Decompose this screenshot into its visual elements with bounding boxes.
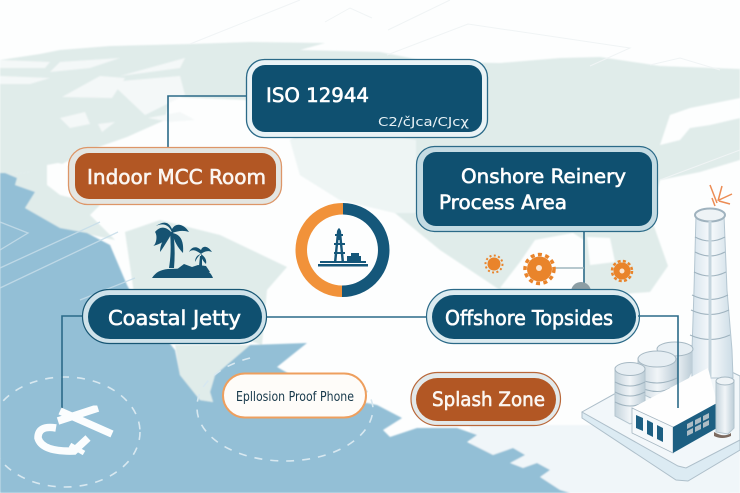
icon: anchor: [38, 408, 112, 453]
platform: [582, 352, 740, 481]
icon: small gear: [486, 256, 502, 272]
text: Process Area: Process Area: [439, 191, 567, 214]
text: Onshore Reinery: Onshore Reinery: [461, 165, 626, 188]
building: [632, 368, 717, 453]
panel: Indoor MCC Room: [68, 148, 282, 204]
panel: Splash Zone: [411, 372, 560, 426]
label: Coastal Jetty: Coastal Jetty: [108, 306, 241, 330]
text: corrosivity classes: C2/čJca/CJcχ: [378, 114, 469, 129]
panel: Explosion Proof Phone: [223, 374, 366, 418]
storage tanks: [615, 342, 693, 424]
panel: Offshore Topsides: [426, 290, 640, 344]
label: Explosion Proof Phone: Epllosion Proof Phone: [236, 390, 354, 405]
dashed range circles: [0, 358, 373, 487]
icon: refinery plant: [582, 185, 740, 481]
flare spark: [710, 185, 732, 206]
gauge dome: [571, 282, 591, 302]
process column: [714, 377, 734, 438]
donut with rig icon: [295, 203, 390, 297]
connector: Offshore Topsides to plant: [638, 316, 678, 408]
panel: Coastal Jetty: [82, 290, 266, 344]
icon: right gear: [612, 261, 632, 281]
label: Indoor MCC Room: Indoor MCC Room: [87, 165, 266, 189]
label: Offshore Topsides: Offshore Topsides: [445, 306, 613, 330]
icon: oil rig: [318, 228, 368, 266]
heading: ISO 12944: ISO 12944: [266, 84, 369, 107]
panel: Onshore Refinery Process Area: [416, 146, 658, 232]
label: Splash Zone: Splash Zone: [432, 388, 545, 411]
smokestack: [690, 208, 733, 378]
panel: ISO 12944: [246, 60, 488, 138]
connector lines: [62, 96, 584, 410]
icon: large gear: [525, 254, 554, 284]
icon: palm island: [152, 223, 213, 278]
